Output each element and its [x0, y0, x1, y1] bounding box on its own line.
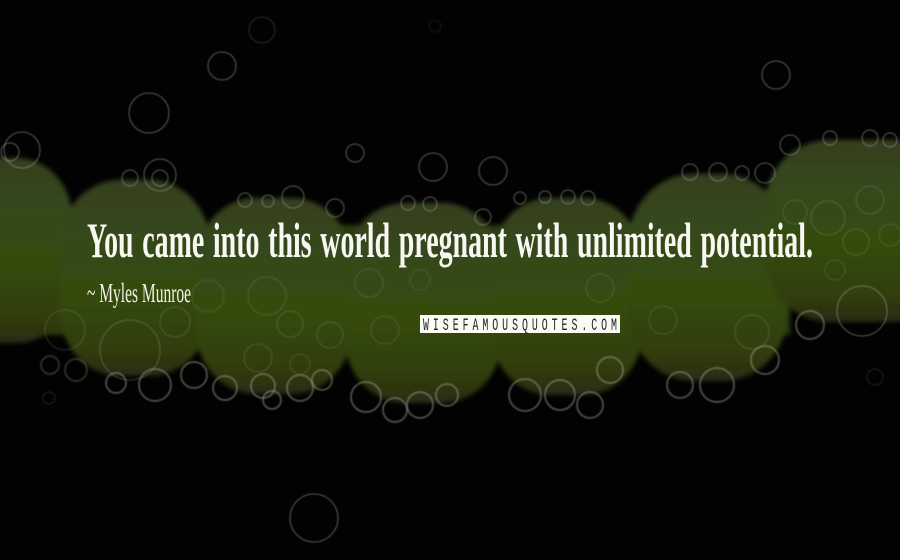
grape cluster [0, 140, 900, 403]
watermark logo: WISEFAMOUSQUOTES.COM [423, 316, 621, 336]
author attribution: ~ Myles Munroe [87, 278, 191, 308]
